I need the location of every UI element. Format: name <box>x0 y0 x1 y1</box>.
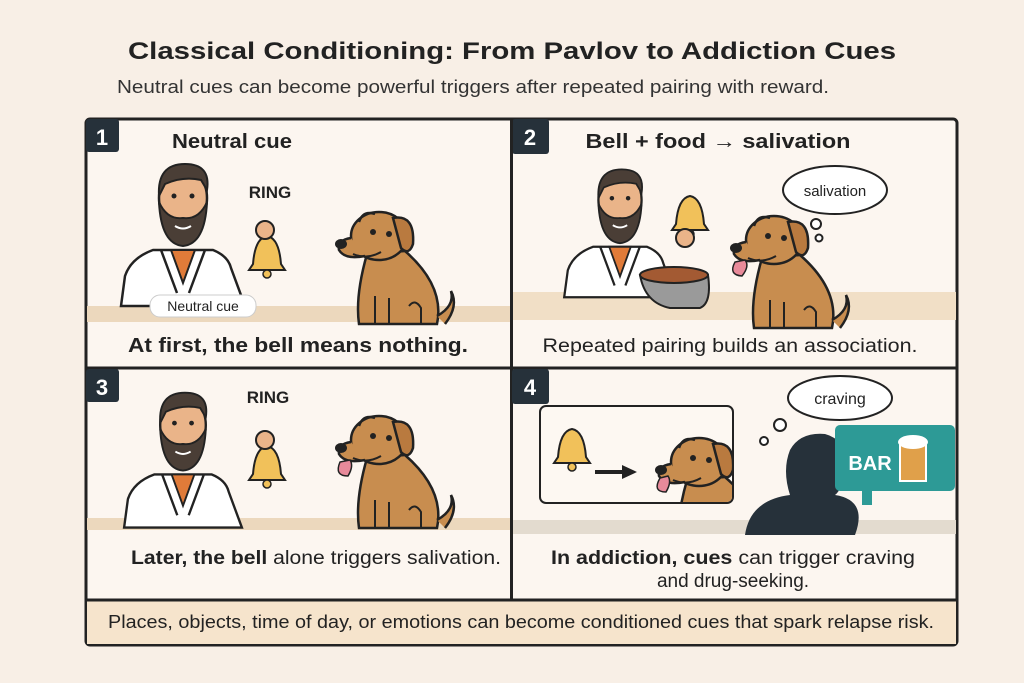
label: neutral cue <box>150 295 256 317</box>
badge 2: 2 <box>524 125 536 150</box>
panel 1: neutral cue <box>86 119 510 357</box>
person silhouette <box>745 434 859 535</box>
title: Classical Conditioning: From Pavlov to Addiction Cues <box>128 38 896 65</box>
panel 4: addiction cues <box>512 369 956 592</box>
illustration: dog salivating <box>730 216 849 328</box>
panel 2: bell + food <box>512 119 956 357</box>
badge 3 <box>86 369 119 402</box>
illustration: scientist with bell and food <box>564 169 709 308</box>
bar sign: BAR <box>848 453 892 475</box>
illustration: dog salivating <box>335 416 454 528</box>
thought bubble: craving <box>760 376 892 445</box>
heading 1: Neutral cue <box>172 131 292 153</box>
caption 1: At first, the bell means nothing. <box>128 335 468 357</box>
bottom banner: Places, objects, time of day, or emotions can become conditioned cues that spark relapse risk. <box>108 612 934 632</box>
illustration: scientist ringing bell: RING <box>247 388 289 407</box>
heading 2: Bell + food → salivation <box>586 131 850 153</box>
subtitle: Neutral cues can become powerful triggers after repeated pairing with reward. <box>117 77 829 97</box>
panel 4: addiction cues: and drug-seeking. <box>657 571 809 592</box>
illustration: dog <box>335 212 454 324</box>
bottom banner <box>86 600 957 644</box>
thought bubble: salivation <box>783 166 887 242</box>
badge 4 <box>512 369 549 404</box>
label: neutral cue: Neutral cue <box>167 298 239 314</box>
badge 2 <box>512 119 549 154</box>
illustration: scientist ringing bell <box>121 164 291 306</box>
caption 3: Later, the bell alone triggers salivation. <box>131 548 501 569</box>
badge 1 <box>86 119 119 152</box>
outer frame <box>86 119 957 645</box>
thought bubble: craving: craving <box>814 391 866 408</box>
dividers <box>510 119 513 600</box>
caption 2: Repeated pairing builds an association. <box>542 336 918 357</box>
badge 1: 1 <box>96 125 108 150</box>
caption 4: In addiction, cues can trigger craving <box>551 548 915 569</box>
badge 3: 3 <box>96 375 108 400</box>
panel 3: bell alone <box>86 369 510 569</box>
illustration: scientist ringing bell: RING <box>249 183 291 202</box>
inset: bell to dog <box>539 405 734 504</box>
bar sign <box>835 425 955 505</box>
badge 4: 4 <box>524 375 537 400</box>
thought bubble: salivation: salivation <box>804 183 866 200</box>
illustration: scientist ringing bell <box>124 388 289 528</box>
